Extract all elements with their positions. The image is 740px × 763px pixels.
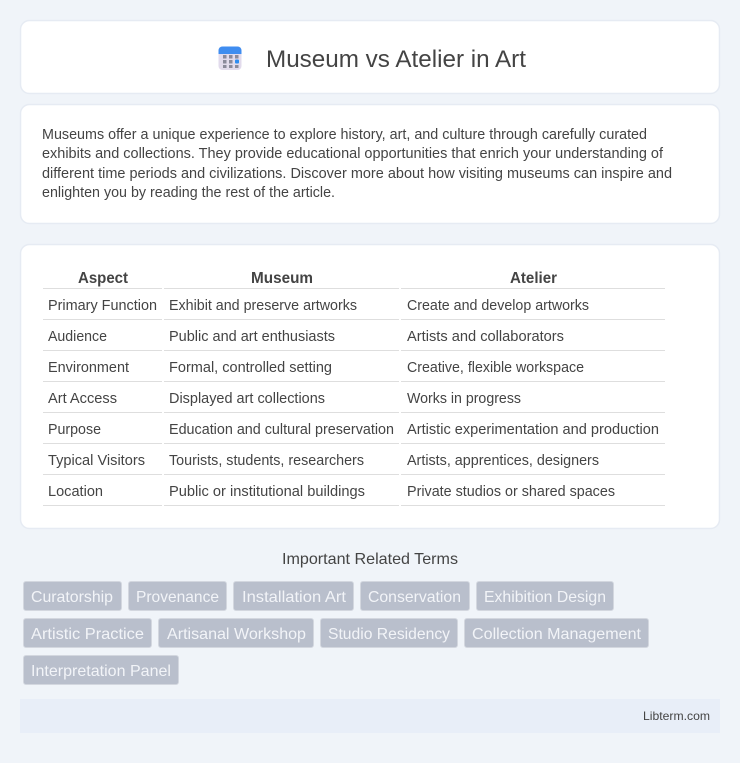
table row: Art Access: Art Access — [48, 391, 117, 407]
panel: header — [20, 20, 720, 94]
table row: Purpose: Education and cultural preservation — [169, 422, 394, 438]
table row: Audience: Audience — [48, 329, 107, 345]
table header row — [43, 270, 665, 289]
related term tags — [24, 582, 648, 684]
tag: Provenance: Provenance — [136, 589, 219, 606]
heading: related terms: Important Related Terms — [282, 551, 458, 568]
tag: Collection Management: Collection Management — [472, 626, 642, 643]
text block: introduction: different time periods and civilizations. Discover more about how visiting museums can inspire and — [42, 166, 672, 182]
tag: Artisanal Workshop: Artisanal Workshop — [167, 626, 306, 643]
table row: Art Access — [43, 391, 665, 413]
table row: Location — [43, 484, 665, 506]
table row: Purpose: Artistic experimentation and production — [407, 422, 659, 438]
tag: Studio Residency — [320, 618, 458, 648]
tag: Interpretation Panel: Interpretation Panel — [31, 663, 171, 680]
icon: calendar — [218, 46, 242, 70]
footer — [20, 699, 720, 733]
tag: Conservation — [360, 582, 470, 610]
tag: Installation Art: Installation Art — [242, 589, 347, 606]
panel: introduction — [20, 104, 720, 224]
text block: introduction: Museums offer a unique experience to explore history, art, and culture through carefully curated — [42, 127, 647, 143]
table row: Environment — [43, 360, 665, 382]
title: Museum vs Atelier in Art — [266, 46, 526, 73]
table row: Typical Visitors — [43, 453, 665, 475]
tag: Exhibition Design: Exhibition Design — [484, 589, 606, 606]
text block: introduction — [42, 127, 672, 201]
tag: Artistic Practice — [24, 618, 152, 648]
table row: Audience — [43, 329, 665, 351]
tag: Interpretation Panel — [24, 656, 178, 684]
tag: Conservation: Conservation — [368, 589, 461, 606]
table header row: Aspect — [78, 270, 128, 287]
table row: Art Access: Works in progress — [407, 391, 521, 407]
table row: Typical Visitors: Artists, apprentices, designers — [407, 453, 599, 469]
table row: Environment: Creative, flexible workspace — [407, 360, 584, 376]
table row: Primary Function: Primary Function — [48, 298, 157, 314]
tag: Studio Residency: Studio Residency — [328, 626, 450, 643]
table row: Environment: Formal, controlled setting — [169, 360, 332, 376]
table row: Purpose: Purpose — [48, 422, 101, 438]
tag: Provenance — [128, 582, 226, 610]
table row: Typical Visitors: Typical Visitors — [48, 453, 145, 469]
table row: Environment: Environment — [48, 360, 129, 376]
table row: Primary Function: Exhibit and preserve artworks — [169, 298, 357, 314]
tag: Artistic Practice: Artistic Practice — [31, 626, 144, 643]
table row: Audience: Artists and collaborators — [407, 329, 564, 345]
table row: Art Access: Displayed art collections — [169, 391, 325, 407]
tag: Curatorship: Curatorship — [31, 589, 113, 606]
tag: Collection Management — [464, 618, 648, 648]
table header row: Atelier — [510, 270, 557, 287]
text block: introduction: enlighten you by reading the rest of the article. — [42, 185, 335, 201]
table row: Location: Public or institutional buildings — [169, 484, 365, 500]
table row: Typical Visitors: Tourists, students, researchers — [169, 453, 364, 469]
text block: introduction: exhibits and collections. They provide educational opportunities that enrich your understanding of — [42, 146, 664, 162]
footer credit: Libterm.com — [643, 709, 710, 723]
table header row: Museum — [251, 270, 313, 287]
table row: Audience: Public and art enthusiasts — [169, 329, 335, 345]
tag: Installation Art — [234, 582, 354, 610]
table row: Purpose — [43, 422, 665, 444]
table row: Primary Function: Create and develop artworks — [407, 298, 589, 314]
tag: Exhibition Design — [476, 582, 614, 610]
table row: Location: Private studios or shared spaces — [407, 484, 615, 500]
tag: Artisanal Workshop — [158, 618, 314, 648]
panel: comparison table — [20, 244, 720, 528]
table row: Location: Location — [48, 484, 103, 500]
table row: Primary Function — [43, 298, 665, 320]
tag: Curatorship — [24, 582, 122, 610]
